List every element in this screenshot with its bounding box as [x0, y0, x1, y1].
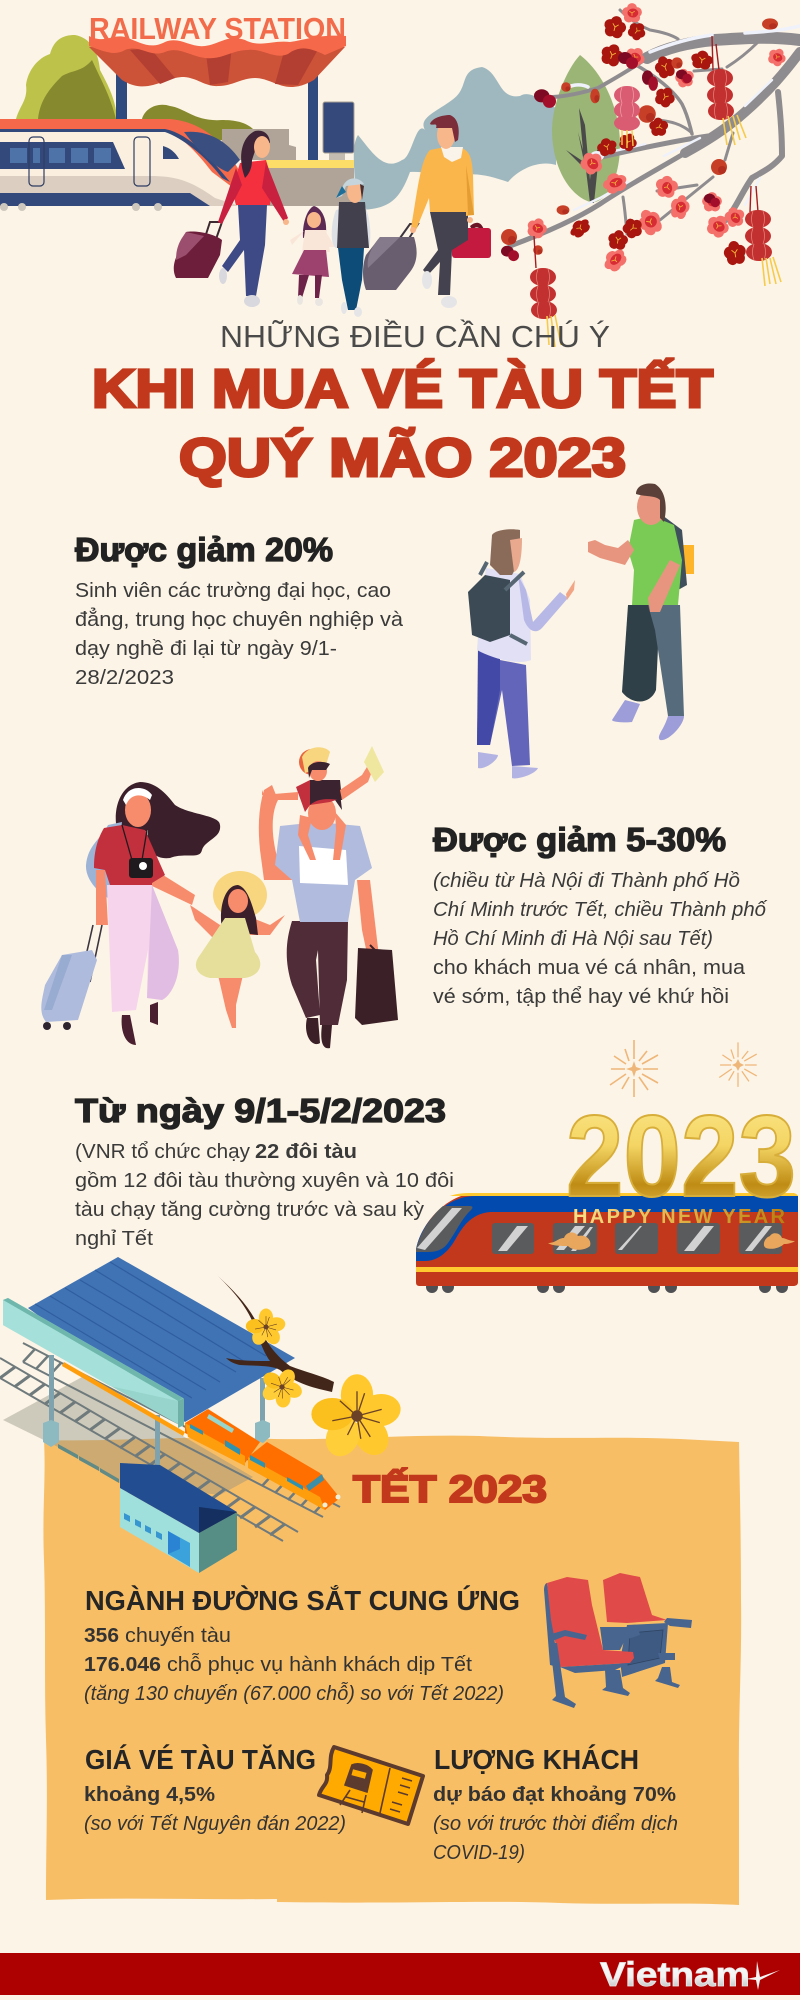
illustration: yellow apricot blossom branch: [218, 1276, 403, 1462]
seats: 176.046: [84, 1653, 161, 1676]
white patch: [299, 846, 348, 885]
woman: [222, 205, 267, 296]
small station building: [120, 1463, 237, 1573]
body text: Sinh viên các trường đại học, cao: [75, 579, 391, 602]
heading: Tet 2023: TẾT 2023: [353, 1467, 547, 1511]
child on shoulders: [296, 780, 342, 812]
icon: train ticket: [319, 1747, 423, 1824]
comparison note: (tăng 130 chuyến (67.000 chỗ) so với Tết 2022): [84, 1682, 504, 1705]
italic route note: Chí Minh trước Tết, chiều Thành phố: [433, 898, 768, 921]
illustration: white high-speed train: [0, 119, 242, 211]
panel: discount 5-30%: [433, 821, 768, 1008]
value: khoảng 4,5%: [84, 1783, 215, 1806]
panel: ticket price: [84, 1744, 346, 1835]
body text: 28/2/2023: [75, 666, 174, 689]
trips: [84, 1624, 231, 1647]
mother's hair: [116, 782, 220, 858]
heading: GIÁ VÉ TÀU TĂNG: [85, 1744, 316, 1775]
snow: [566, 26, 800, 210]
canopy: [116, 61, 318, 165]
red bag: [470, 223, 484, 232]
camera: [122, 825, 147, 860]
father's trousers: [287, 921, 348, 1025]
station sign board: [3, 1298, 183, 1427]
illustration: hills and tree backdrop: [352, 55, 620, 210]
station sign: RAILWAY STATION: [89, 11, 346, 46]
mother's top: [94, 825, 165, 885]
suitcase: [80, 925, 102, 982]
bushes: [16, 35, 117, 119]
display board: [329, 153, 345, 160]
panel: passenger numbers: [433, 1744, 678, 1864]
benches: [58, 1444, 119, 1483]
body: [416, 1193, 798, 1286]
suitcase right: [370, 945, 375, 965]
windows: [492, 1223, 782, 1254]
father's head: [308, 796, 336, 830]
trips: chuyến tàu: [125, 1624, 231, 1647]
clouds: [548, 1232, 590, 1250]
illustration: railway station: [16, 11, 354, 206]
title line 2: QUÝ MÃO 2023: [179, 428, 626, 488]
wheels: [426, 1281, 788, 1293]
ground shadow: [3, 1377, 253, 1495]
windshield: [416, 1206, 472, 1252]
body text: vé sớm, tập thể hay vé khứ hồi: [433, 985, 729, 1008]
father's raised arm: [259, 785, 295, 880]
roof: [28, 1257, 295, 1422]
illustration: family on holiday: [41, 746, 398, 1048]
map: [364, 746, 384, 782]
mother's head: [125, 793, 151, 827]
woman left: [477, 645, 530, 766]
platform: [222, 129, 296, 160]
heading: LƯỢNG KHÁCH: [434, 1744, 639, 1775]
lanterns: [534, 36, 758, 268]
body text: dạy nghề đi lại từ ngày 9/1-: [75, 637, 337, 660]
heading: Được giảm 5-30%: [433, 821, 726, 858]
boy: [332, 204, 370, 248]
posts: [49, 1355, 265, 1465]
note: COVID-19): [433, 1841, 525, 1864]
title: [92, 319, 713, 488]
red blossoms: [602, 14, 628, 40]
illustration: family with luggage: [174, 115, 491, 317]
backpack: [86, 822, 122, 900]
man right: [622, 605, 660, 702]
italic route note: [433, 869, 768, 950]
tracks: [0, 1343, 340, 1541]
body text: [75, 579, 404, 689]
body text: nghỉ Tết: [75, 1227, 153, 1250]
branches: [510, 10, 800, 246]
seats: chỗ phục vụ hành khách dịp Tết: [167, 1653, 472, 1676]
note: [433, 1812, 678, 1864]
trips: 356: [84, 1624, 119, 1647]
italic route note: Hồ Chí Minh đi Hà Nội sau Tết): [433, 927, 713, 950]
subtitle: NHỮNG ĐIỀU CẦN CHÚ Ý: [220, 319, 610, 354]
child's legs: [298, 812, 346, 860]
girl: [303, 206, 326, 238]
illustration: fireworks: [610, 1040, 757, 1097]
body text: đẳng, trung học chuyên nghiệp và: [75, 607, 404, 631]
body text: [75, 1140, 454, 1250]
mother's arms: [96, 870, 195, 925]
man: [423, 212, 468, 295]
note: (so với trước thời điểm dịch: [433, 1812, 678, 1835]
illustration: red new year train: [416, 1091, 798, 1293]
value: dự báo đạt khoảng 70%: [433, 1783, 676, 1806]
illustration: isometric station: [0, 1257, 340, 1573]
body text: 22 đôi tàu: [255, 1140, 357, 1163]
girl: [190, 905, 285, 945]
grey suitcase: [395, 224, 418, 248]
illustration: two students talking: [468, 483, 694, 778]
father's shirt: [275, 822, 372, 922]
panel: 22 train pairs: [75, 1092, 454, 1250]
note: (so với Tết Nguyên đán 2022): [84, 1812, 346, 1835]
panel: orange statistics background: [43, 1436, 741, 1905]
body text: cho khách mua vé cá nhân, mua: [433, 956, 746, 979]
body text: (VNR tổ chức chạy: [75, 1140, 251, 1163]
icon: train seats: [544, 1573, 692, 1708]
maroon suitcase: [197, 222, 222, 262]
title line 1: KHI MUA VÉ TÀU TẾT: [92, 359, 713, 419]
body text: tàu chạy tăng cường trước và sau kỳ: [75, 1198, 425, 1221]
heading: Từ ngày 9/1-5/2/2023: [75, 1092, 446, 1129]
footer bar: [0, 1953, 800, 1995]
body text: [433, 956, 746, 1008]
happy new year: HAPPY NEW YEAR: [573, 1206, 786, 1228]
logo: Vietnam: [600, 1956, 750, 1994]
mother's trousers: [107, 885, 177, 1012]
panel: student discount: [75, 531, 404, 689]
italic route note: (chiều từ Hà Nội đi Thành phố Hồ: [433, 869, 740, 892]
heading: Được giảm 20%: [75, 531, 333, 568]
orange train: [62, 1362, 185, 1436]
illustration: plum blossom branch with lanterns: [501, 3, 800, 347]
body text: gồm 12 đôi tàu thường xuyên và 10 đôi: [75, 1169, 454, 1192]
panel: railway supply: [84, 1585, 520, 1705]
heading: NGÀNH ĐƯỜNG SẮT CUNG ỨNG: [85, 1585, 520, 1616]
